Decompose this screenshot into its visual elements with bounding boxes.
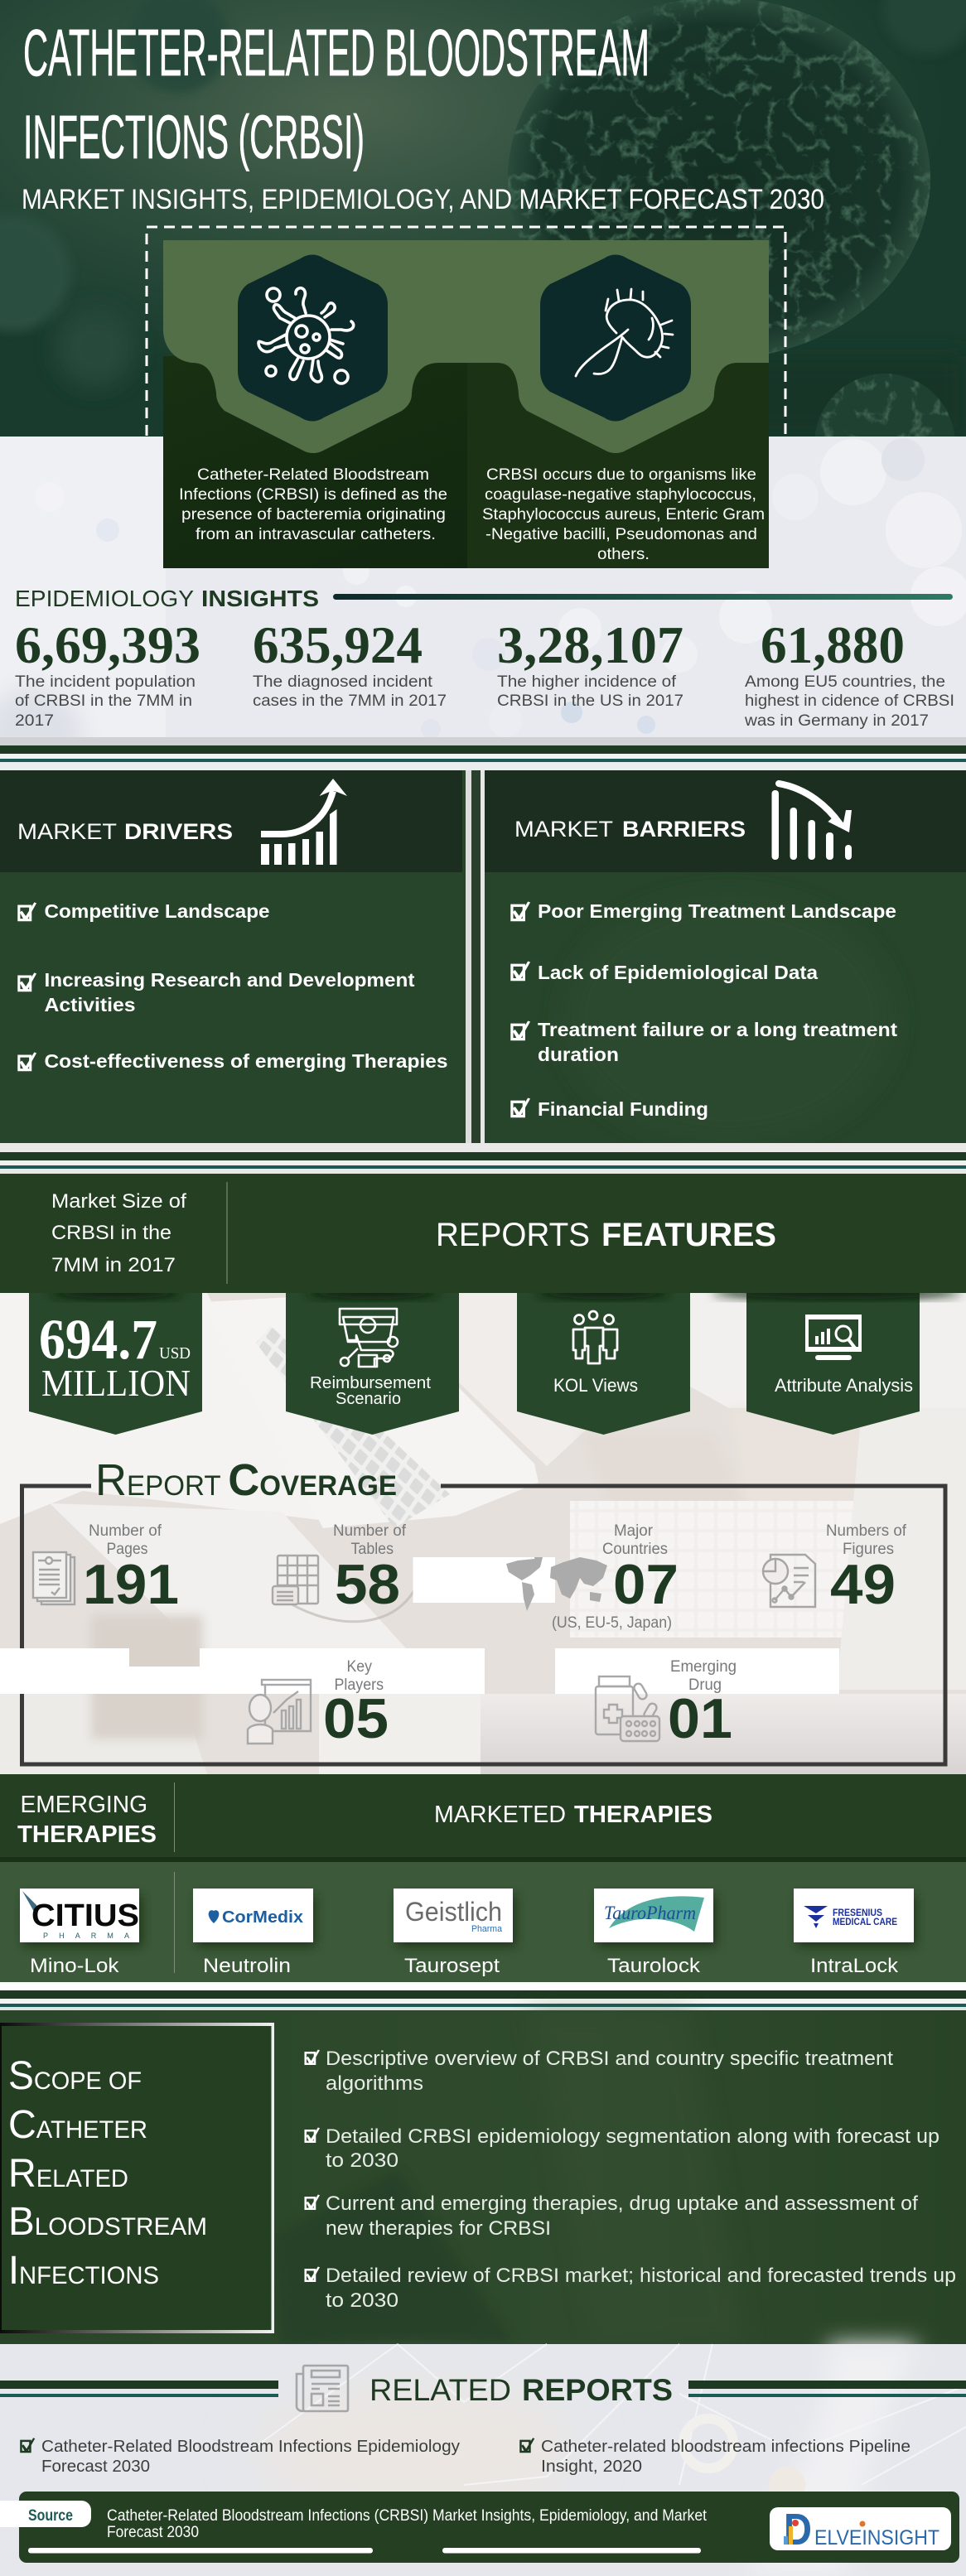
stat: US incidence — [497, 615, 683, 710]
panel: definition cards — [163, 240, 769, 568]
stat: diagnosed incident cases: The diagnosed incident — [253, 673, 433, 691]
coverage: countries — [506, 1522, 679, 1632]
heading: epidemiology insights: EPIDEMIOLOGY — [15, 586, 194, 611]
coverage: pages — [33, 1522, 179, 1616]
hexagon: virus — [238, 255, 388, 421]
therapy names: Taurolock — [607, 1955, 701, 1977]
logo: Citius — [20, 1889, 139, 1942]
list: drivers: Activities — [45, 994, 136, 1015]
icon: pills — [596, 1676, 659, 1741]
therapy names: Taurosept — [404, 1955, 500, 1977]
banner: market size pentagon: MILLION — [41, 1362, 191, 1404]
icon: world map — [506, 1557, 607, 1611]
stat: incident population: 2017 — [15, 712, 54, 730]
coverage: tables — [273, 1522, 407, 1616]
heading: epidemiology insights: INSIGHTS — [201, 586, 319, 611]
light bubbles background: epidemiology — [0, 437, 966, 787]
logo: DelveInsight: D — [784, 2505, 812, 2554]
related report: epidemiology forecast: Forecast 2030 — [41, 2458, 150, 2476]
list: barriers: Lack of Epidemiological Data — [538, 962, 818, 983]
icon: table — [273, 1556, 318, 1604]
rules beside related reports heading — [0, 2381, 966, 2397]
list: drivers — [19, 900, 448, 1072]
dashed frame — [147, 227, 785, 436]
heading: epidemiology insights — [15, 586, 319, 611]
cause text: Staphylococcus aureus, Enteric Gram — [482, 506, 765, 523]
banner: reimbursement scenario: Reimbursement — [310, 1374, 431, 1392]
banner: KOL views: KOL Views — [553, 1375, 638, 1396]
hexagon: bacterium — [540, 255, 691, 421]
heading: market drivers: MARKET — [17, 819, 117, 844]
heading: related reports — [369, 2373, 673, 2407]
list: barriers: Poor Emerging Treatment Landscape — [538, 900, 896, 922]
banner: KOL views — [517, 1293, 690, 1435]
heading: market barriers: MARKET — [514, 817, 613, 842]
icon: document stack — [33, 1552, 75, 1604]
coverage: figures: Numbers of — [826, 1522, 907, 1540]
coverage: countries: Major — [614, 1522, 654, 1540]
related report: pipeline insight — [520, 2438, 910, 2476]
heading: reports features: FEATURES — [601, 1217, 776, 1253]
coverage: emerging drug: Drug — [688, 1676, 722, 1694]
icon: virus — [258, 288, 354, 384]
coverage: tables: Number of — [333, 1522, 407, 1540]
heading: market barriers: BARRIERS — [622, 817, 746, 842]
coverage: key players: Key — [346, 1658, 372, 1676]
title: INFECTIONS (CRBSI) — [23, 103, 365, 171]
band: therapies heading — [0, 1774, 966, 1862]
logo: Geistlich: Pharma — [471, 1924, 503, 1934]
related report: epidemiology forecast — [21, 2438, 460, 2476]
list: scope: algorithms — [326, 2072, 423, 2095]
definition text: presence of bacteremia originating — [181, 506, 446, 523]
heading: related reports: RELATED — [369, 2373, 511, 2407]
logo: TauroPharm — [594, 1889, 713, 1942]
stripes under therapies — [0, 1982, 966, 2010]
panel divider — [466, 770, 485, 1147]
photo background: laptop on desk — [0, 1293, 966, 1774]
panel: scope title box: SCOPE OF — [8, 2054, 142, 2098]
stat: Germany incidence: highest in cidence of CRBSI — [745, 692, 954, 710]
title — [23, 16, 650, 171]
cause text: -Negative bacilli, Pseudomonas and — [485, 526, 757, 543]
logo: Fresenius: FRESENIUS — [833, 1908, 882, 1918]
stat: Germany incidence: was in Germany in 2017 — [744, 712, 929, 730]
logo: CorMedix — [193, 1889, 313, 1942]
stripes under market panels — [0, 1143, 966, 1174]
coverage: tables: 58 — [335, 1553, 400, 1616]
logo: CorMedix: CorMedix — [222, 1908, 303, 1927]
band: market size and features — [0, 1174, 966, 1293]
logo: Geistlich: Geistlich — [405, 1897, 502, 1927]
related report: pipeline insight: Catheter-related bloodstream infections Pipeline — [541, 2438, 910, 2456]
icon: falling chart — [772, 784, 852, 860]
coverage: figures: 49 — [830, 1553, 896, 1616]
panel: market drivers — [0, 770, 466, 1143]
coverage: pages: Number of — [89, 1522, 162, 1540]
list: barriers: duration — [538, 1044, 619, 1065]
hero background: virus photo — [0, 0, 966, 514]
heading: market barriers — [514, 817, 746, 842]
logo: TauroPharm: TauroPharm — [604, 1903, 696, 1923]
stat: incident population: 6,69,393 — [15, 615, 200, 674]
band: therapies heading: EMERGING — [20, 1792, 147, 1818]
stat: incident population — [15, 615, 200, 730]
icon: people — [573, 1311, 617, 1363]
coverage: pages: 191 — [83, 1553, 179, 1616]
coverage: figures — [763, 1522, 907, 1616]
logo: Citius: PHARMA — [43, 1932, 129, 1940]
heading: market drivers — [17, 819, 233, 844]
panel: scope title box: INFECTIONS — [8, 2249, 159, 2293]
therapy names: Neutrolin — [203, 1955, 291, 1977]
list: scope: to 2030 — [326, 2289, 398, 2312]
band: market size and features: 7MM in 2017 — [51, 1254, 176, 1276]
list: scope — [306, 2048, 956, 2312]
panel: source footer: Catheter-Related Bloodstream Infections (CRBSI) Market Insights, Epidemiology, and Market — [107, 2507, 708, 2525]
panel: scope background — [0, 2010, 966, 2344]
list: barriers: Treatment failure or a long treatment — [538, 1019, 897, 1040]
stat: Germany incidence — [744, 615, 954, 730]
band: therapies heading: THERAPIES — [17, 1821, 157, 1848]
panel: market barriers — [485, 770, 966, 1143]
band: market size and features: CRBSI in the — [51, 1222, 171, 1244]
band: market size and features: Market Size of — [51, 1190, 186, 1213]
heading rule — [333, 594, 953, 600]
list: drivers: Cost-effectiveness of emerging Therapies — [45, 1050, 447, 1072]
olive banner with pointers — [163, 240, 769, 453]
icon: monitor with magnifier — [805, 1315, 862, 1360]
definition text: Infections (CRBSI) is defined as the — [179, 486, 447, 504]
list: barriers: Financial Funding — [538, 1098, 708, 1120]
source pill — [0, 2501, 91, 2527]
therapy names: IntraLock — [810, 1955, 899, 1977]
stat: diagnosed incident cases: cases in the 7MM in 2017 — [253, 692, 447, 710]
cause text: others. — [597, 546, 650, 563]
heading: reports features: REPORTS — [436, 1217, 590, 1253]
banner: market size pentagon — [29, 1293, 202, 1435]
stat: US incidence: 3,28,107 — [497, 615, 683, 674]
panel: scope title box — [0, 2023, 274, 2333]
icon: newspaper — [297, 2366, 348, 2411]
definition text: Catheter-Related Bloodstream — [197, 466, 429, 484]
band: therapies heading: MARKETED — [434, 1802, 566, 1828]
panel: scope title box: CATHETER — [8, 2103, 147, 2147]
heading: reports features — [436, 1217, 776, 1253]
stat: Germany incidence: Among EU5 countries, the — [745, 673, 945, 691]
subtitle: MARKET INSIGHTS, EPIDEMIOLOGY, AND MARKET FORECAST 2030 — [22, 184, 824, 215]
stat: Germany incidence: 61,880 — [761, 615, 905, 674]
heading: report coverage: REPORT COVERAGE — [95, 1455, 397, 1505]
icon: rising chart — [261, 779, 347, 865]
related report: pipeline insight: Insight, 2020 — [541, 2458, 642, 2476]
definition text: from an intravascular catheters. — [196, 526, 436, 543]
banner: reimbursement scenario: Scenario — [336, 1390, 401, 1408]
coverage: emerging drug: Emerging — [670, 1658, 737, 1676]
icon: bacterium — [576, 289, 673, 376]
logo: DelveInsight: ELVEINSIGHT — [814, 2526, 939, 2549]
coverage: countries: 07 — [613, 1553, 679, 1616]
band: therapies heading: THERAPIES — [574, 1802, 712, 1828]
panel: scope title box: BLOODSTREAM — [8, 2200, 207, 2244]
icon: cash and hand — [340, 1309, 398, 1367]
banner: market size pentagon: 694.7 — [39, 1308, 157, 1371]
list: scope: Current and emerging therapies, drug uptake and assessment of — [326, 2192, 918, 2215]
logo: DelveInsight — [770, 2505, 951, 2554]
stat: US incidence: The higher incidence of — [497, 673, 677, 691]
coverage: key players — [248, 1658, 389, 1750]
logo: Fresenius — [794, 1889, 914, 1942]
banner: market size pentagon: USD — [159, 1344, 191, 1363]
coverage: countries: (US, EU-5, Japan) — [552, 1614, 672, 1632]
banner: reimbursement scenario — [286, 1293, 459, 1435]
coverage: figures: Figures — [843, 1541, 894, 1558]
icon: presenter — [248, 1680, 311, 1744]
coverage: countries: Countries — [602, 1541, 668, 1558]
banner: attribute analysis: Attribute Analysis — [775, 1375, 913, 1396]
list: drivers: Increasing Research and Development — [45, 969, 415, 991]
coverage: pages: Pages — [106, 1541, 147, 1558]
list: scope: Detailed review of CRBSI market; historical and forecasted trends up — [326, 2265, 956, 2287]
therapy names: Mino-Lok — [30, 1955, 120, 1977]
definition text — [179, 466, 447, 543]
logo: Citius: CITIUS — [31, 1898, 139, 1933]
source pill: Source — [28, 2507, 73, 2525]
stat: incident population: The incident population — [15, 673, 196, 691]
related report: epidemiology forecast: Catheter-Related Bloodstream Infections Epidemiology — [41, 2438, 460, 2456]
logo: Geistlich — [394, 1889, 513, 1942]
heading: related reports: REPORTS — [522, 2373, 673, 2407]
white patches in coverage — [0, 1557, 839, 1694]
list: scope: Descriptive overview of CRBSI and country specific treatment — [326, 2048, 893, 2070]
therapy names — [30, 1955, 899, 1977]
band shadow — [50, 1287, 961, 1299]
cause text: coagulase-negative staphylococcus, — [485, 486, 756, 504]
stripes under epidemiology — [0, 745, 966, 770]
stat: diagnosed incident cases — [253, 615, 447, 710]
stat: incident population: of CRBSI in the 7MM in — [15, 692, 192, 710]
list: scope: Detailed CRBSI epidemiology segmentation along with forecast up — [326, 2125, 939, 2148]
related reports background: network — [0, 2344, 966, 2576]
list: scope: to 2030 — [326, 2149, 398, 2172]
coverage: key players: 05 — [323, 1687, 389, 1750]
band: therapy logos — [0, 1862, 966, 1982]
stat: diagnosed incident cases: 635,924 — [253, 615, 423, 674]
banner: attribute analysis — [746, 1293, 920, 1435]
panel: scope title box: RELATED — [8, 2152, 128, 2196]
cause text — [482, 466, 765, 563]
cause text: CRBSI occurs due to organisms like — [486, 466, 756, 484]
coverage: emerging drug: 01 — [668, 1687, 732, 1750]
panel: source footer: Forecast 2030 — [107, 2524, 199, 2541]
panel: source footer — [0, 2492, 959, 2563]
coverage: key players: Players — [335, 1676, 384, 1694]
heading: market drivers: DRIVERS — [124, 819, 233, 844]
list: barriers — [512, 900, 897, 1120]
frame: report coverage — [22, 1486, 945, 1764]
list: drivers: Competitive Landscape — [45, 900, 270, 922]
coverage: tables: Tables — [351, 1541, 394, 1558]
logo: Fresenius: MEDICAL CARE — [833, 1918, 897, 1927]
coverage: emerging drug — [596, 1658, 737, 1750]
icon: report with pie chart — [763, 1555, 815, 1607]
stat: US incidence: CRBSI in the US in 2017 — [497, 692, 683, 710]
list: scope: new therapies for CRBSI — [326, 2217, 551, 2240]
